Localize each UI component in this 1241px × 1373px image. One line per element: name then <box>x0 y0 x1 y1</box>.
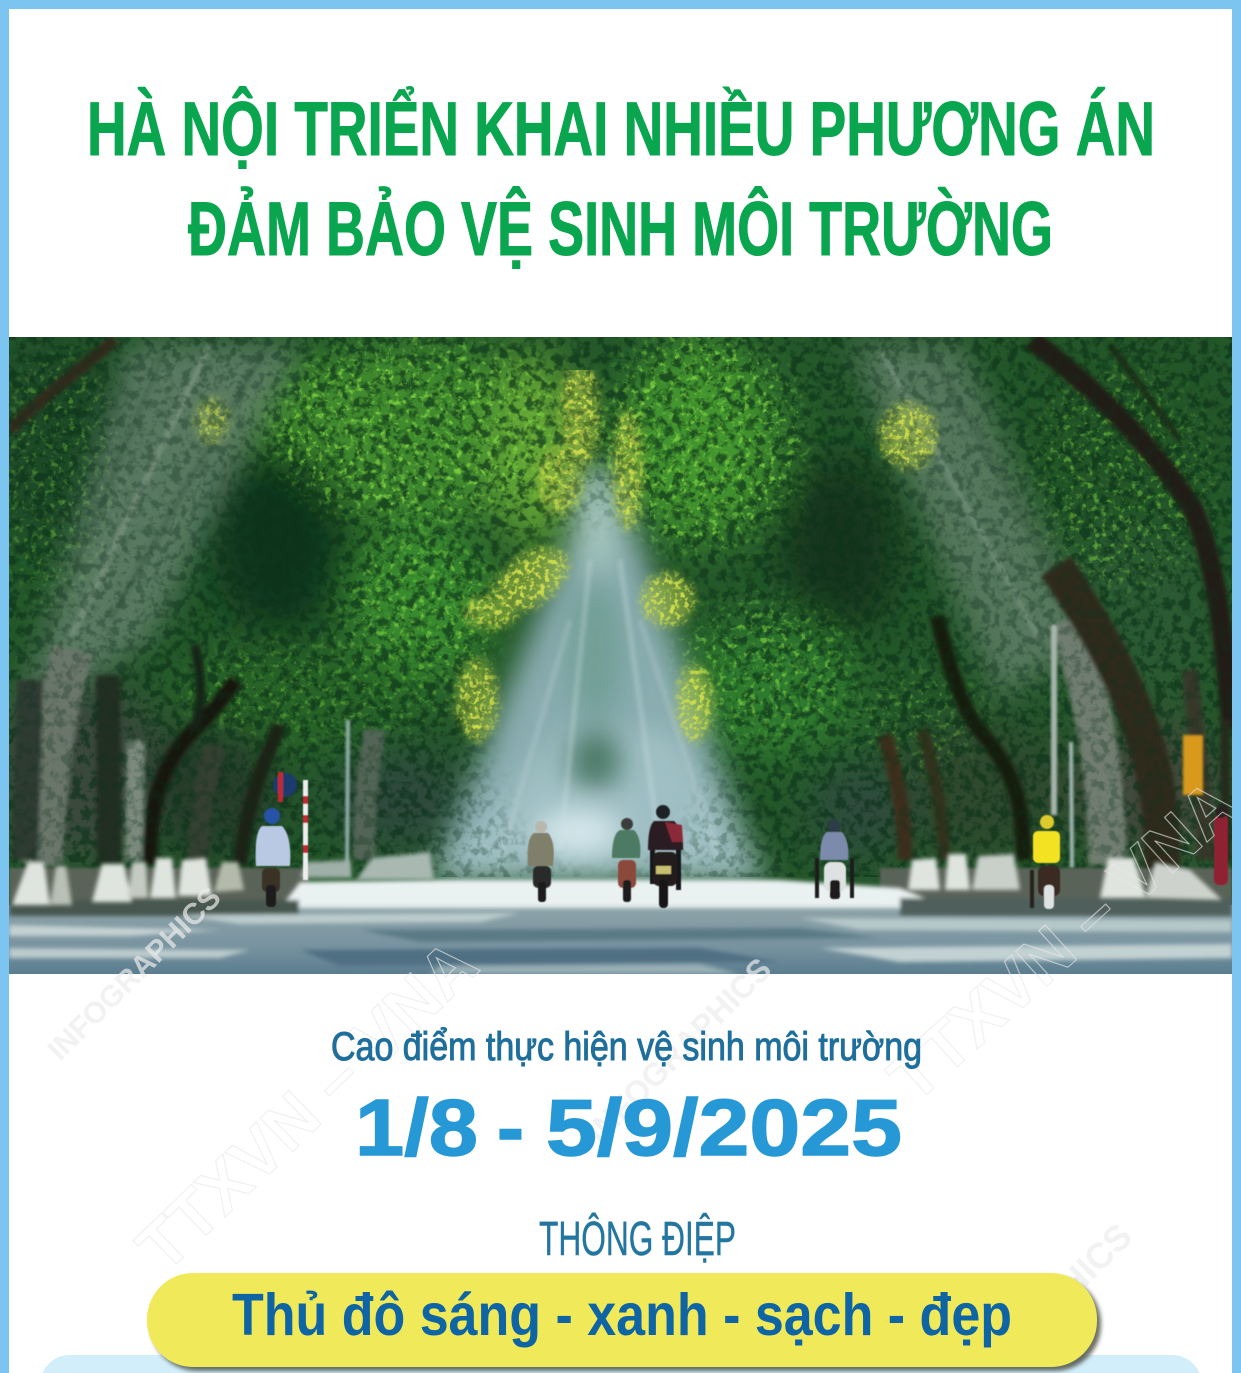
date range: 5/9/2025 <box>546 1083 902 1172</box>
message pill: Thủ đô sáng - xanh - sạch - đẹp <box>232 1282 1012 1348</box>
ground behind trees <box>9 868 1232 908</box>
light blue panel <box>40 1355 1202 1373</box>
road light and shadow bands <box>9 880 1232 974</box>
title <box>87 86 1155 272</box>
signpost <box>273 772 308 880</box>
date range <box>355 1083 902 1172</box>
light streaks inside the beams <box>40 345 1080 860</box>
watermarks: INFOGRAPHICS <box>579 951 778 1150</box>
faint bark texture over the trees <box>9 337 1232 877</box>
trunks and branches <box>10 340 1232 875</box>
motorbike riders <box>256 805 1228 909</box>
message pill <box>147 1273 1101 1371</box>
date range: 1/8 <box>355 1083 478 1172</box>
yellow-green sunlit leaves <box>180 370 940 750</box>
photo: tree-lined Hanoi street with motorbikes <box>0 330 1232 974</box>
watermarks: INFOGRAPHICS <box>42 881 228 1067</box>
distant tree and bright opening <box>534 580 623 854</box>
watermarks: TTXVN – VNA <box>123 925 492 1286</box>
subheading: peak period: Cao điểm thực hiện vệ sinh môi trường <box>331 1025 922 1069</box>
haze and light beams <box>20 345 1090 880</box>
watermarks <box>42 765 1241 1373</box>
label: message: THÔNG ĐIỆP <box>539 1212 736 1266</box>
road <box>9 905 1232 974</box>
canopy leaf texture <box>9 337 1232 877</box>
poles and sign <box>347 625 1203 875</box>
date range: - <box>497 1083 524 1172</box>
white-painted tree bases <box>12 852 1222 905</box>
